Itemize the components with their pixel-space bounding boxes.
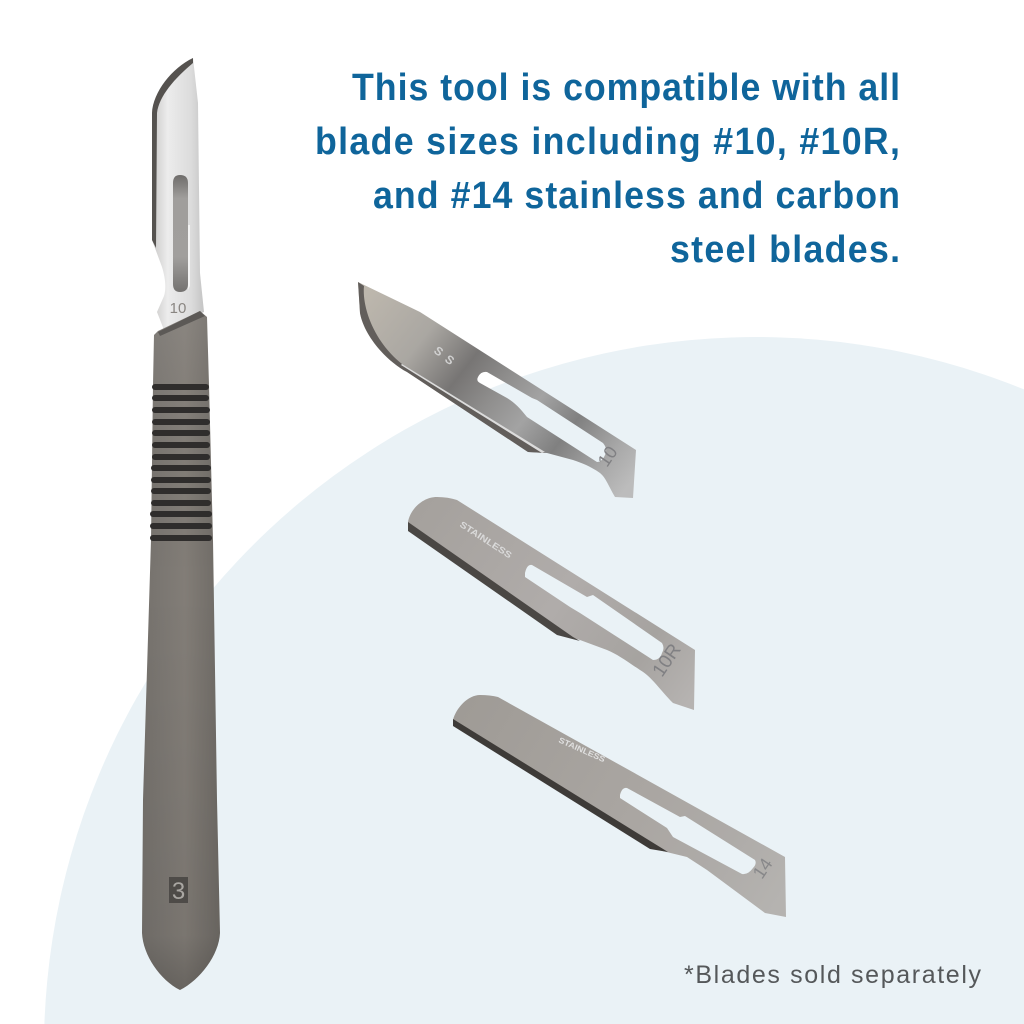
headline — [315, 66, 900, 270]
headline: blade sizes including #10, #10R, — [315, 120, 900, 162]
scalpel handle with #10 blade — [142, 58, 220, 990]
blade #10 — [358, 282, 636, 498]
blade #14: STAINLESS — [557, 736, 607, 764]
blade #10: 10 — [594, 442, 622, 470]
handle body — [142, 311, 220, 990]
attached blade: 10 — [170, 300, 186, 317]
blade #10R: STAINLESS — [458, 519, 514, 560]
blade #10R — [408, 497, 695, 710]
blade #14 — [453, 695, 786, 917]
footnote: *Blades sold separately — [684, 961, 982, 989]
handle grip ribs — [153, 387, 209, 538]
handle size stamp: 3 — [172, 878, 185, 905]
headline: and #14 stainless and carbon — [373, 174, 900, 216]
headline: steel blades. — [670, 228, 900, 270]
handle size stamp — [169, 877, 188, 905]
attached blade — [152, 58, 204, 330]
blade #10: SS — [431, 343, 462, 372]
blade #10R: 10R — [649, 640, 686, 681]
background circle — [44, 337, 1024, 1024]
headline: This tool is compatible with all — [352, 66, 900, 108]
blade #14: 14 — [749, 854, 777, 882]
